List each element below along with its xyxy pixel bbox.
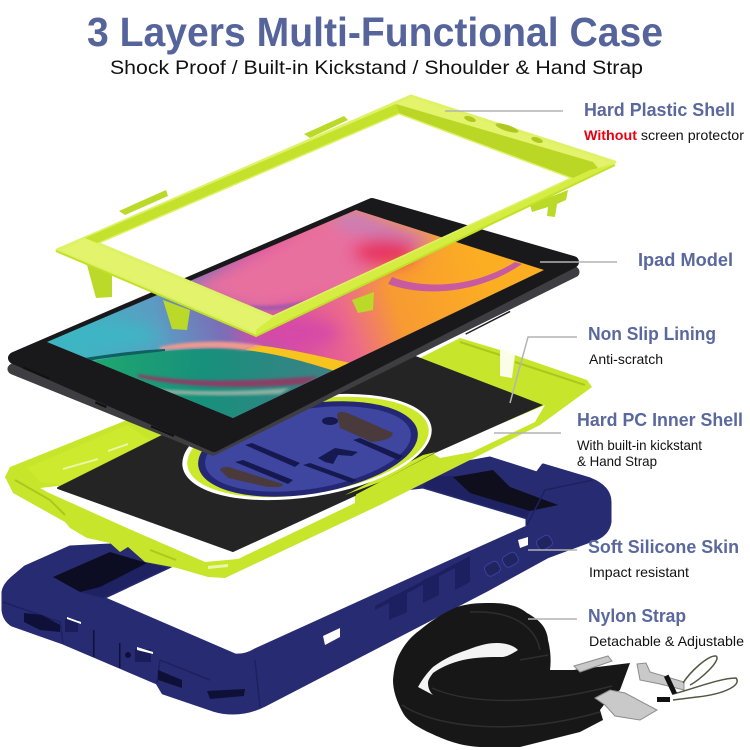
hard PC inner shell: lime case with pad and dial — [5, 338, 592, 578]
bright highlight at wall gap — [500, 348, 515, 378]
lime wall slits — [63, 443, 228, 569]
label: non slip lining: Anti-scratch — [589, 352, 663, 367]
label: non slip lining: Non Slip Lining — [588, 324, 716, 344]
right interior black cut-out — [453, 470, 558, 511]
hard plastic shell: lime top frame — [56, 96, 615, 336]
green lower wave — [93, 348, 340, 418]
lime fin at dial corner — [345, 452, 436, 495]
lanyard loops — [673, 656, 737, 700]
lime wall shade lines — [15, 342, 585, 560]
strap white gap — [418, 643, 518, 695]
white ring around dial — [175, 378, 439, 516]
side buttons — [483, 534, 554, 578]
white port notches — [67, 537, 528, 654]
strap fold lines — [402, 612, 612, 727]
metal buckle and clips — [574, 656, 684, 720]
label: nylon strap — [588, 606, 744, 649]
tablet front face — [14, 204, 573, 446]
peach streak — [160, 342, 262, 350]
bottom edge slots — [24, 613, 245, 699]
label: ipad model: Ipad Model — [638, 250, 733, 270]
ribs on long side — [375, 556, 470, 620]
lime ring around dial — [180, 381, 436, 513]
left interior black cut-out — [53, 552, 147, 592]
tablet screen wallpaper — [47, 210, 544, 418]
label: hard pc inner shell: With built-in kickstant — [577, 438, 702, 453]
lanyard knots — [657, 675, 677, 702]
soft silicone skin: navy outer case — [3, 458, 610, 713]
dark and pink streak — [138, 374, 318, 387]
camera and sensor holes — [464, 115, 543, 144]
label: nylon strap: Nylon Strap — [588, 606, 686, 626]
label: soft silicone skin: Soft Silicone Skin — [588, 537, 739, 557]
right interior dark strip — [423, 476, 530, 518]
navy corner seams — [3, 480, 593, 707]
label: nylon strap: Detachable & Adjustable — [589, 634, 744, 649]
white inner rim right — [432, 405, 545, 458]
tablet side edge — [13, 206, 574, 450]
yellow streak — [245, 345, 350, 371]
lower right edge — [256, 164, 615, 336]
pink stripe right — [388, 262, 522, 291]
nylon strap — [393, 603, 737, 747]
hand strap band lower — [220, 467, 283, 487]
non slip lining: black pad right — [300, 350, 543, 495]
non slip lining: black pad left — [58, 432, 360, 551]
pale streak — [145, 388, 290, 395]
dial slots — [235, 417, 403, 484]
leader lines — [445, 111, 617, 619]
inner lip upper left — [85, 104, 399, 243]
hand strap band upper — [337, 412, 393, 442]
frame lower edge shade — [56, 165, 615, 336]
label: hard plastic shell: Hard Plastic Shell — [584, 100, 735, 120]
frame body — [57, 96, 615, 334]
label: hard pc inner shell — [577, 410, 743, 469]
left interior dark strip — [80, 563, 167, 598]
dark teal streak — [85, 349, 165, 361]
tablet speaker and port — [23, 367, 174, 437]
lime wall left lighter face — [27, 425, 150, 485]
label: hard pc inner shell: & Hand Strap — [577, 454, 657, 469]
label: soft silicone skin: Impact resistant — [589, 565, 689, 580]
inner lip top right — [396, 104, 598, 178]
frame tabs — [87, 116, 568, 330]
purple stripe under pink — [250, 295, 344, 312]
label: hard pc inner shell: Hard PC Inner Shell — [577, 410, 743, 430]
title: 3 Layers Multi-Functional Case — [87, 9, 663, 55]
label: hard plastic shell — [584, 100, 744, 143]
subtitle: Shock Proof / Built-in Kickstand / Shoulder & Hand Strap — [110, 57, 643, 79]
rotating navy dial — [191, 387, 425, 511]
tablet: iPad model — [13, 200, 574, 450]
label: non slip lining — [588, 324, 716, 367]
tablet side buttons — [465, 311, 511, 335]
label: soft silicone skin — [588, 537, 739, 580]
white inner rim left — [40, 486, 355, 562]
label: hard plastic shell: Without screen protector — [584, 128, 744, 143]
